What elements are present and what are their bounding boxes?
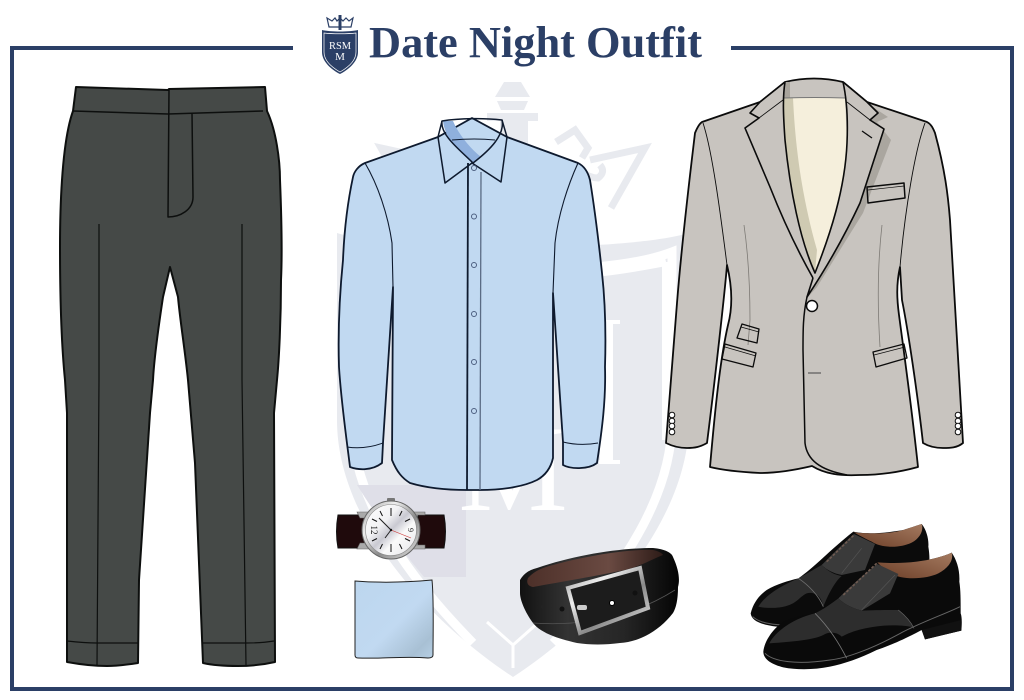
watermark crest: M [458,400,568,537]
logo crest: RSM [329,41,351,52]
trousers [60,87,282,666]
title: Date Night Outfit [369,18,702,67]
wristwatch: 9 [406,528,415,532]
back shoe [751,524,929,627]
pocket square [355,580,433,658]
blazer [666,78,963,475]
logo crest: M [335,51,345,63]
wristwatch [336,498,446,559]
watermark crest [337,82,689,677]
oxford shoes [751,524,962,669]
front shoe [763,553,962,669]
logo crest [322,15,358,74]
wristwatch: 12 [369,526,379,534]
leather belt [520,548,679,644]
dress shirt [339,118,605,490]
